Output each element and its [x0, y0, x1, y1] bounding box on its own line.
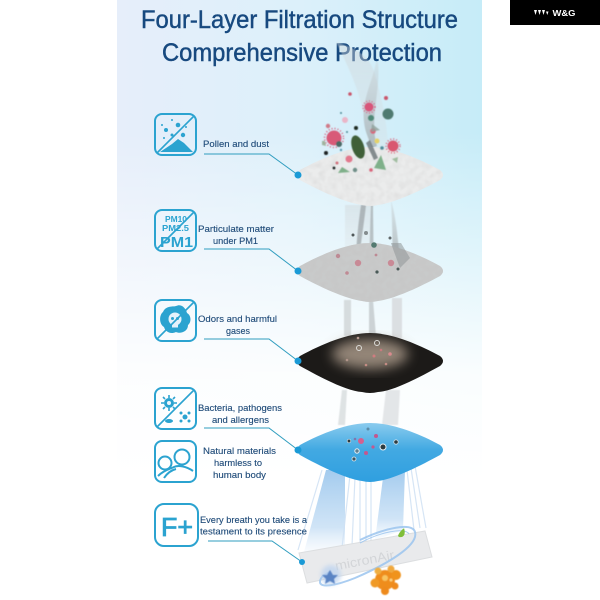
pollutant particles above layer 1 [322, 92, 400, 173]
cartridge embossed brand: micronAir [334, 547, 396, 573]
title [141, 6, 458, 67]
label: particulate matter [198, 224, 274, 247]
icon: natural materials, people [155, 441, 196, 482]
icon: PM particulate [155, 210, 196, 251]
particles above layer 2 [336, 231, 400, 275]
label: natural materials [203, 446, 276, 481]
icon: green leaf [398, 528, 405, 537]
air stream below blue layer [298, 466, 426, 552]
layer 3: black activated carbon filter [297, 333, 443, 393]
label: odors and harmful gases [198, 314, 277, 337]
layer 4: blue filter [297, 423, 443, 482]
label: particulate matter: Particulate matter [198, 224, 274, 235]
icon: pollen and dust [155, 114, 196, 155]
label: bacteria, pathogens and allergens: Bacteria, pathogens [198, 403, 282, 414]
layer 1: white pollen filter [297, 147, 443, 206]
label: odors and harmful gases: Odors and harmful [198, 314, 277, 325]
label: every breath: Every breath you take is a [200, 515, 308, 526]
label: natural materials: harmless to [214, 458, 262, 469]
label: bacteria, pathogens and allergens: and allergens [212, 415, 269, 426]
logo badge [510, 0, 600, 25]
icon: orange osmanthus blossom [370, 566, 401, 595]
icon: odors and gases [155, 300, 196, 341]
label: every breath [200, 515, 308, 538]
icon: F+ rating: F+ [161, 512, 193, 542]
ribbon overlap on layer 2 [391, 243, 410, 268]
label: pollen and dust: Pollen and dust [203, 139, 269, 150]
label: natural materials: human body [213, 470, 266, 481]
label: bacteria, pathogens and allergens [198, 403, 282, 426]
leader line: particulate [204, 249, 302, 274]
leader line: breath [208, 541, 305, 565]
layer 2: grey PM filter [297, 243, 443, 302]
title: Comprehensive Protection [162, 39, 442, 67]
leader line: pollen [204, 154, 302, 178]
scent cartridge [299, 531, 432, 583]
leader line: odors [204, 339, 302, 364]
icon: PM particulate: PM10 [165, 215, 188, 224]
icon: blue flower [321, 565, 341, 585]
label: particulate matter: under PM1 [213, 236, 258, 247]
translucent ribbons between layers [336, 42, 402, 425]
icon: PM particulate: PM1 [160, 234, 193, 251]
label: odors and harmful gases: gases [226, 326, 250, 337]
swirl around cartridge [320, 527, 415, 585]
title: Four-Layer Filtration Structure [141, 6, 458, 34]
logo badge: W&G [552, 9, 576, 18]
icon: F+ rating [155, 504, 198, 546]
background panel [117, 0, 482, 600]
icon: bacteria and allergens [155, 388, 196, 429]
leader line: bacteria [204, 428, 302, 454]
label: natural materials: Natural materials [203, 446, 276, 457]
icon: PM particulate: PM2.5 [162, 223, 189, 233]
label: every breath: testament to its presence [200, 526, 307, 538]
